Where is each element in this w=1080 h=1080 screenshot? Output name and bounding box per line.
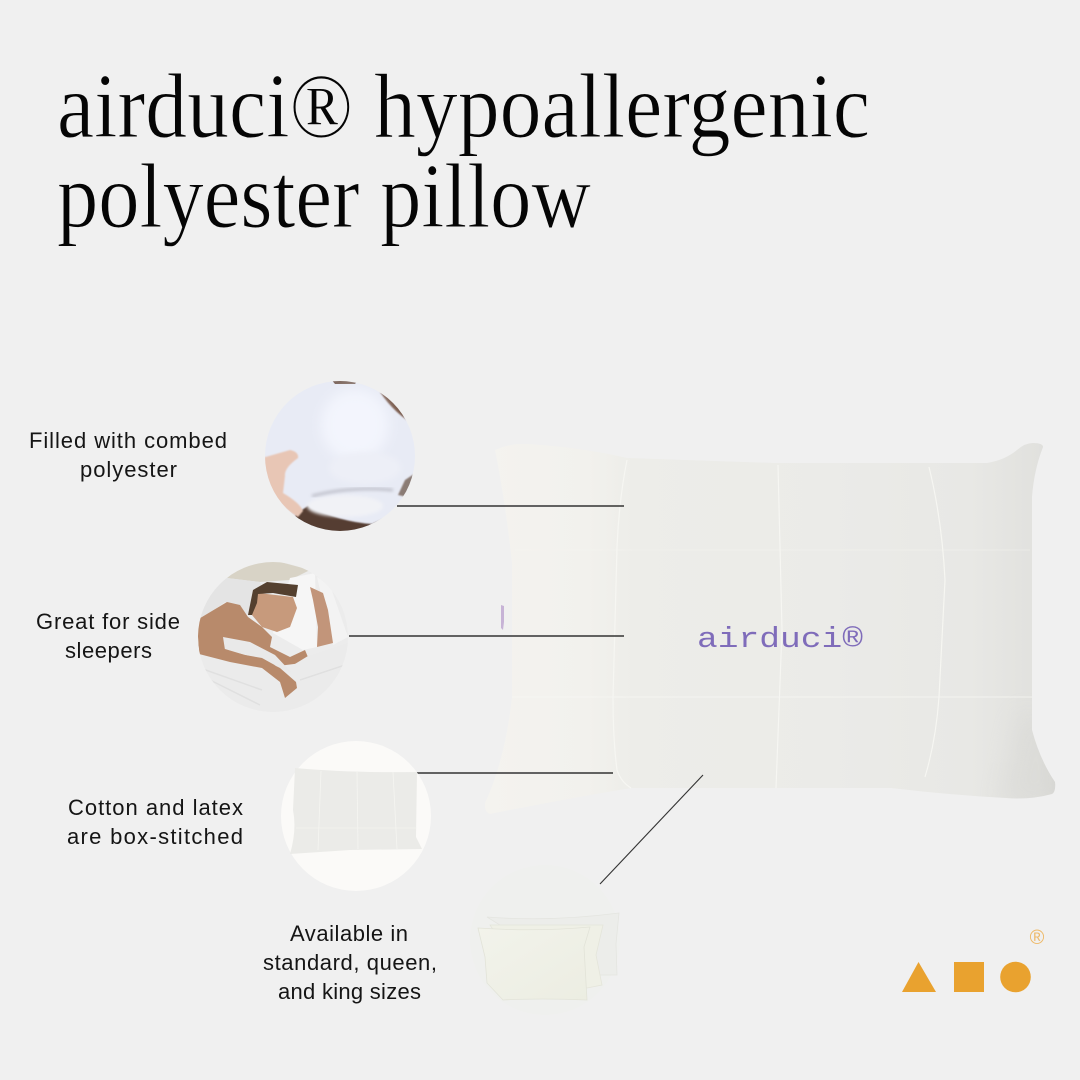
text: available sizes: Available in	[290, 921, 408, 946]
logo: triangle, square, circle: ®	[1030, 927, 1045, 949]
icon: stacked pillows circle	[470, 865, 620, 1015]
text: great for side sleepers: sleepers	[65, 638, 152, 663]
man's raised arm	[310, 587, 333, 647]
pillow tag sliver	[501, 605, 504, 630]
text: great for side sleepers	[36, 609, 180, 663]
text: box-stitched	[67, 795, 243, 849]
text: box-stitched: Cotton and latex	[68, 795, 243, 820]
main pillow photo	[485, 443, 1065, 814]
text: filled with combed polyester	[29, 428, 227, 482]
text: available sizes: and king sizes	[278, 979, 421, 1004]
title: airduci® hypoallergenic	[57, 55, 870, 157]
logo: triangle, square, circle	[902, 927, 1045, 992]
man's torso	[197, 602, 310, 668]
icon: polyester fluff photo	[265, 381, 413, 531]
text: filled with combed polyester: polyester	[80, 457, 177, 482]
icon: sleeping man photo	[198, 562, 342, 706]
bed sheet	[200, 652, 310, 668]
text: available sizes	[263, 921, 437, 1004]
title: polyester pillow	[57, 145, 591, 247]
text: great for side sleepers: Great for side	[36, 609, 180, 634]
man's forearm	[199, 649, 297, 698]
leader line: polyester fill	[397, 505, 624, 507]
bed sheet fold	[223, 637, 285, 666]
man's hair	[248, 582, 298, 615]
text: box-stitched: are box-stitched	[67, 824, 243, 849]
man's face	[252, 593, 297, 632]
text: filled with combed polyester: Filled with combed	[29, 428, 227, 453]
pillow brand label: airduci®	[697, 623, 863, 656]
icon: small pillow circle	[281, 741, 431, 891]
leader line: side sleepers	[349, 635, 624, 637]
leader line: box stitching	[417, 772, 613, 774]
title	[57, 55, 870, 247]
leader line: sizes	[600, 775, 703, 884]
text: available sizes: standard, queen,	[263, 950, 437, 975]
